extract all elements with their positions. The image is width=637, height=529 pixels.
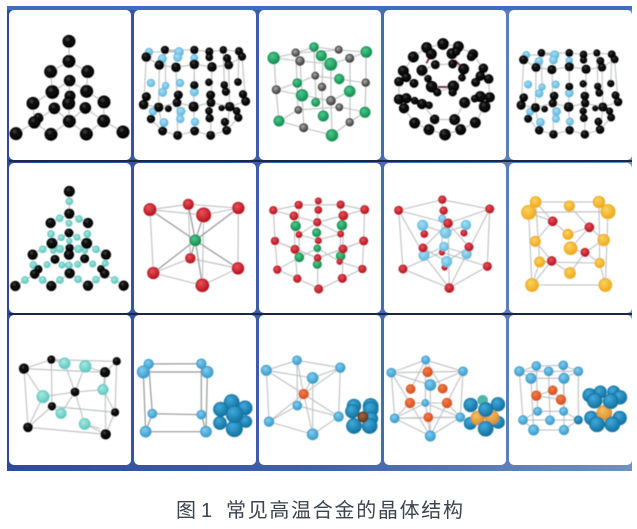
crystal model: black tetrahedral diamond (10, 35, 129, 140)
caption: 1 (201, 500, 212, 522)
crystal model: black fullerene cage (394, 39, 494, 140)
crystal model: yellow and red diamond-cubic cell (522, 196, 615, 291)
crystal model: red body-centred cell with green centre (144, 199, 244, 292)
caption: 图 (176, 500, 196, 522)
crystal model: black and blue hexagonal lattice (139, 46, 250, 139)
crystal model: blue body-centred cell with orange centre and cluster (261, 356, 378, 440)
crystal model: green and grey cubic lattice (268, 43, 372, 141)
caption: 常见高温合金的晶体结构 (226, 499, 465, 522)
crystal model: blue and orange face-centred cell with cluster (387, 356, 505, 441)
crystal model: red and green multi-cell lattice (270, 198, 369, 293)
crystal model: black and blue hexagonal lattice, repeat (517, 50, 622, 138)
crystal model: black and aqua tetrahedral lattice (11, 186, 128, 291)
crystal model: black and aqua face-centred cell (19, 356, 120, 439)
crystal model: blue simple cubic cell with sphere cluster (137, 359, 252, 437)
crystal model: red and blue cubic lattice (395, 196, 494, 292)
crystal model: blue hexagonal cell with orange atoms and cluster (515, 361, 627, 435)
